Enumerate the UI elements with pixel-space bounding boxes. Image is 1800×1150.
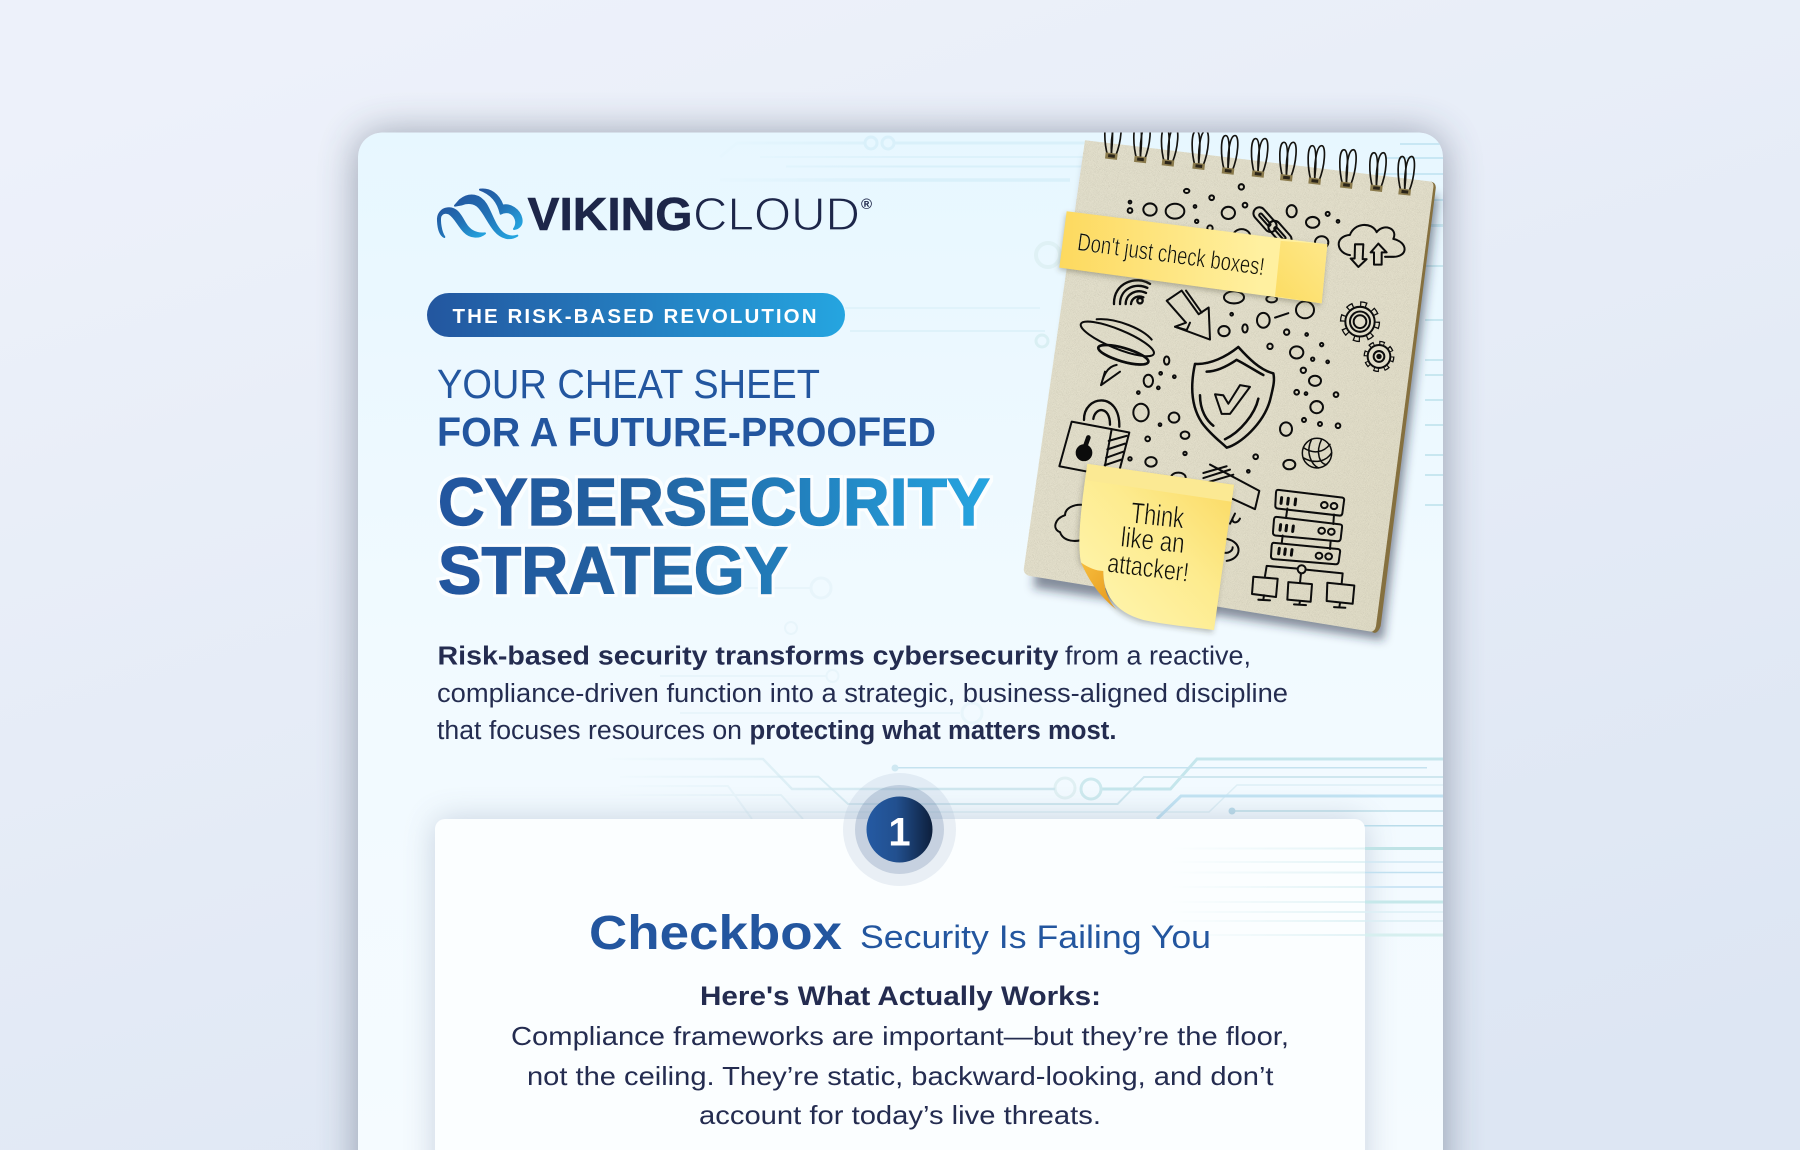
intro paragraph	[437, 642, 1288, 745]
section body text: account for today’s live threats.	[699, 1100, 1101, 1130]
section body text: Here's What Actually Works:	[700, 981, 1101, 1011]
icon: cloud waves	[438, 189, 522, 238]
logo wordmark: ®	[861, 196, 872, 213]
doodle: padlock	[1059, 400, 1129, 475]
number badge 1	[843, 773, 956, 886]
sticky note: think like an attacker	[1078, 464, 1234, 633]
sticky note: think like an attacker: attacker!	[1106, 548, 1191, 588]
section heading	[589, 907, 1211, 960]
doodle: server rack with network	[1252, 490, 1354, 608]
doodle: cloud with up and down arrows	[1339, 225, 1405, 267]
logo wordmark: VIKING	[528, 188, 692, 240]
doodle: shield with check mark	[1192, 347, 1274, 448]
doodle: tag	[1203, 465, 1259, 561]
spiral binding	[1104, 132, 1416, 196]
intro paragraph: from a reactive,	[1065, 642, 1251, 670]
intro paragraph: protecting what matters most.	[750, 717, 1116, 745]
notebook illustration	[1024, 121, 1438, 640]
circuit pattern: right of section	[600, 759, 1443, 819]
intro paragraph: that focuses resources on	[437, 717, 742, 745]
doodle: chain link	[1252, 206, 1293, 240]
section body text: not the ceiling. They’re static, backward-looking, and don’t	[527, 1061, 1274, 1091]
intro paragraph: Risk-based security transforms cybersecurity	[438, 642, 1059, 670]
sticky note: think like an attacker: like an	[1119, 520, 1186, 559]
logo: VikingCloud	[438, 188, 872, 240]
doodle: small cloud	[1055, 505, 1085, 541]
doodle: gear small	[1366, 343, 1392, 370]
sticky note: think like an attacker: Think	[1129, 497, 1186, 535]
intro paragraph: compliance-driven function into a strategic, business-aligned discipline	[437, 680, 1288, 708]
circuit pattern: top	[809, 136, 1443, 506]
pill label	[427, 293, 845, 337]
sticky curl	[1081, 563, 1117, 610]
section body text: Compliance frameworks are important—but they’re the floor,	[511, 1021, 1289, 1051]
pill label: THE RISK-BASED REVOLUTION	[452, 305, 816, 328]
section card 1	[435, 819, 1365, 1150]
notebook paper	[1024, 140, 1433, 632]
doodle: tornado	[1077, 315, 1157, 385]
title: CYBERSECURITY	[438, 465, 990, 540]
title: YOUR CHEAT SHEET	[437, 361, 820, 407]
section heading: Checkbox	[589, 907, 842, 960]
card shadow	[358, 134, 1443, 1150]
logo wordmark: CLOUD	[693, 188, 860, 240]
sticky note: don't just check boxes	[1059, 211, 1327, 306]
notebook shadow	[1033, 157, 1438, 640]
section body text	[511, 981, 1289, 1130]
section heading: Security Is Failing You	[860, 919, 1211, 955]
section card shadow	[435, 819, 1365, 1150]
number badge 1: 1	[888, 810, 911, 854]
doodle: arrow	[1167, 291, 1210, 340]
doodle: wifi signal	[1114, 280, 1150, 304]
circuit pattern: lines beside section card	[1360, 826, 1443, 935]
doodle: scattered bubbles	[1128, 184, 1340, 482]
title: FOR A FUTURE-PROOFED	[437, 409, 936, 455]
notebook page edge	[1372, 181, 1436, 633]
logo wordmark	[528, 188, 872, 240]
faint circuit lines showing through card	[1170, 848, 1365, 935]
title: STRATEGY	[438, 534, 788, 608]
sticky note: don't just check boxes: Don't just check boxes!	[1076, 229, 1266, 281]
doodle: gear large	[1343, 304, 1377, 339]
circuit pattern: middle left	[660, 578, 982, 723]
main infographic card	[358, 132, 1443, 1150]
title	[437, 361, 990, 608]
doodles	[1055, 184, 1405, 608]
doodle: globe	[1302, 438, 1332, 468]
